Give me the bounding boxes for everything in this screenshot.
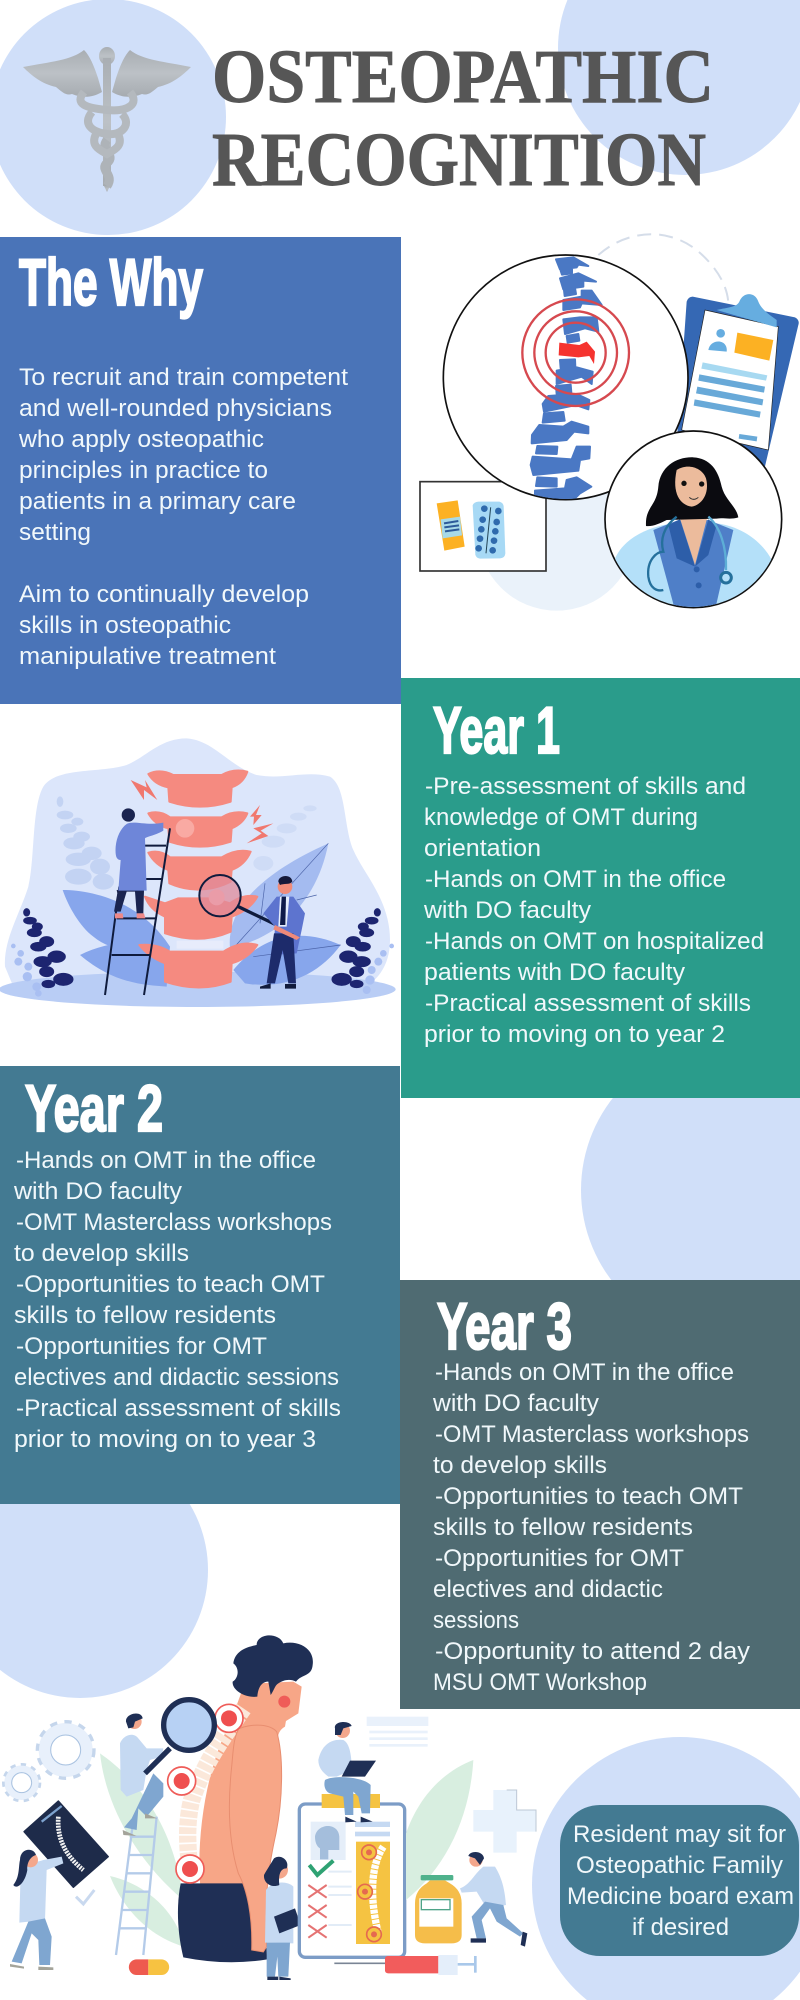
blob	[5, 738, 390, 987]
doctor portrait	[605, 431, 782, 610]
text block: -Hands on OMT on hospitalized	[425, 928, 764, 955]
text block: To recruit and train competent	[19, 364, 348, 391]
clipboard	[677, 294, 799, 473]
ladder	[116, 1817, 157, 1955]
text block: knowledge of OMT during	[424, 804, 698, 831]
illustration: doctor, spine and clipboard	[420, 234, 799, 611]
shorts	[178, 1883, 267, 1962]
text block: Aim to continually develop	[19, 581, 309, 608]
vertebrae	[139, 771, 257, 987]
magnifier	[145, 1700, 214, 1773]
text block: sessions	[433, 1607, 519, 1634]
text block: who apply osteopathic	[18, 426, 264, 453]
text block: -Practical assessment of skills	[425, 990, 751, 1017]
text block: with DO faculty	[423, 897, 591, 924]
pale backdrop circle	[478, 453, 636, 611]
text block: skills to fellow residents	[433, 1514, 693, 1541]
text block: with DO faculty	[432, 1390, 599, 1417]
text block: -Opportunities for OMT	[16, 1333, 267, 1360]
jar	[415, 1875, 462, 1943]
x-ray tablet	[24, 1801, 108, 1887]
arm	[229, 1725, 282, 1952]
medicine box	[420, 482, 546, 571]
leaves	[100, 1753, 183, 1900]
background leaves	[57, 796, 114, 890]
text block: prior to moving on to year 3	[14, 1426, 316, 1453]
glow	[176, 819, 194, 838]
text block: -Opportunity to attend 2 day	[435, 1638, 750, 1665]
icon: caduceus	[23, 47, 191, 192]
targets	[168, 1704, 243, 1883]
pale notes	[367, 1717, 428, 1747]
title: RECOGNITION	[212, 118, 706, 202]
text block: -Practical assessment of skills	[16, 1395, 341, 1422]
illustration: spine with tiny doctors	[0, 738, 396, 1007]
text block: prior to moving on to year 2	[424, 1021, 725, 1048]
background circle: top right	[558, 0, 800, 175]
doctor with magnifier	[120, 1714, 163, 1836]
doctor on ladder	[114, 808, 163, 918]
magnifying glass	[199, 875, 280, 927]
text block: skills in osteopathic	[19, 612, 231, 639]
pill	[129, 1959, 169, 1975]
text block: electives and didactic sessions	[14, 1364, 339, 1391]
background circle: top left	[0, 0, 226, 235]
text block: -Hands on OMT in the office	[16, 1147, 316, 1174]
text block: -Opportunities to teach OMT	[16, 1271, 325, 1298]
text block: MSU OMT Workshop	[433, 1669, 647, 1696]
man with laptop on books	[318, 1722, 380, 1822]
title	[212, 35, 714, 202]
dashed arc	[598, 234, 728, 305]
background circle: lower right	[532, 1737, 800, 2000]
person pushing jar	[460, 1852, 527, 1947]
text block: setting	[19, 519, 91, 546]
pale plant right	[363, 944, 394, 994]
text block: -Opportunities to teach OMT	[435, 1483, 743, 1510]
gears	[3, 1722, 94, 1801]
text block: and well-rounded physicians	[19, 395, 332, 422]
text block: to develop skills	[433, 1452, 607, 1479]
spine	[531, 257, 602, 499]
syringe	[334, 1955, 477, 1975]
text block: -Hands on OMT in the office	[435, 1359, 734, 1386]
illustration: back pain team	[3, 1635, 536, 1980]
callout: board exam: Medicine board exam	[567, 1883, 794, 1910]
text block: orientation	[424, 835, 541, 862]
red vertebra	[559, 342, 595, 364]
lightning bolts	[131, 780, 273, 843]
text block: manipulative treatment	[19, 643, 276, 670]
text block: -Pre-assessment of skills and	[425, 773, 746, 800]
doctor with magnifier	[260, 876, 305, 989]
text block: -Hands on OMT in the office	[425, 866, 726, 893]
text block	[13, 1147, 341, 1453]
clipboard with chart	[299, 1804, 405, 1957]
text block: skills to fellow residents	[14, 1302, 276, 1329]
text block: with DO faculty	[13, 1178, 182, 1205]
target centres	[174, 1710, 237, 1877]
heading: The Why	[19, 245, 203, 319]
heading: Year 2	[25, 1071, 163, 1145]
dark plant left	[24, 909, 73, 987]
big circle with spine	[443, 255, 688, 500]
ladder	[105, 828, 170, 995]
text block: -OMT Masterclass workshops	[435, 1421, 749, 1448]
panel: Year 2	[0, 1066, 400, 1504]
tick	[76, 1890, 94, 1904]
text block: principles in practice to	[19, 457, 268, 484]
text block: -OMT Masterclass workshops	[16, 1209, 332, 1236]
text block: to develop skills	[14, 1240, 189, 1267]
text block	[432, 1359, 750, 1696]
ground	[0, 972, 396, 1007]
green leaf right	[406, 1760, 473, 1900]
title: OSTEOPATHIC	[212, 35, 714, 119]
text block: electives and didactic	[433, 1576, 663, 1603]
callout: board exam: Osteopathic Family	[576, 1852, 783, 1879]
pale plant left	[11, 944, 42, 997]
dark plant right	[332, 909, 380, 987]
callout: board exam	[560, 1805, 799, 1956]
man torso	[199, 1692, 290, 1890]
disc	[177, 941, 223, 949]
plus	[473, 1790, 536, 1853]
callout: board exam: if desired	[632, 1914, 729, 1941]
blue leaves	[63, 890, 170, 951]
text block	[423, 773, 764, 1048]
head	[233, 1635, 313, 1722]
heading: Year 3	[437, 1289, 572, 1363]
text block: patients in a primary care	[19, 488, 296, 515]
panel: Year 1	[401, 678, 800, 1098]
doctor holding tablet	[10, 1850, 63, 1970]
heading: Year 1	[433, 693, 560, 767]
panel: The Why	[0, 237, 401, 704]
callout: board exam: Resident may sit for	[573, 1821, 786, 1848]
background circle: middle right	[581, 1041, 800, 1339]
panel: Year 3	[400, 1280, 800, 1709]
spine line	[188, 1708, 243, 1870]
background circle: lower left	[0, 1442, 208, 1698]
text block: -Opportunities for OMT	[435, 1545, 684, 1572]
text block: patients with DO faculty	[424, 959, 685, 986]
rings	[522, 299, 629, 406]
text block	[18, 364, 348, 670]
small doctor with folder	[264, 1857, 301, 1980]
